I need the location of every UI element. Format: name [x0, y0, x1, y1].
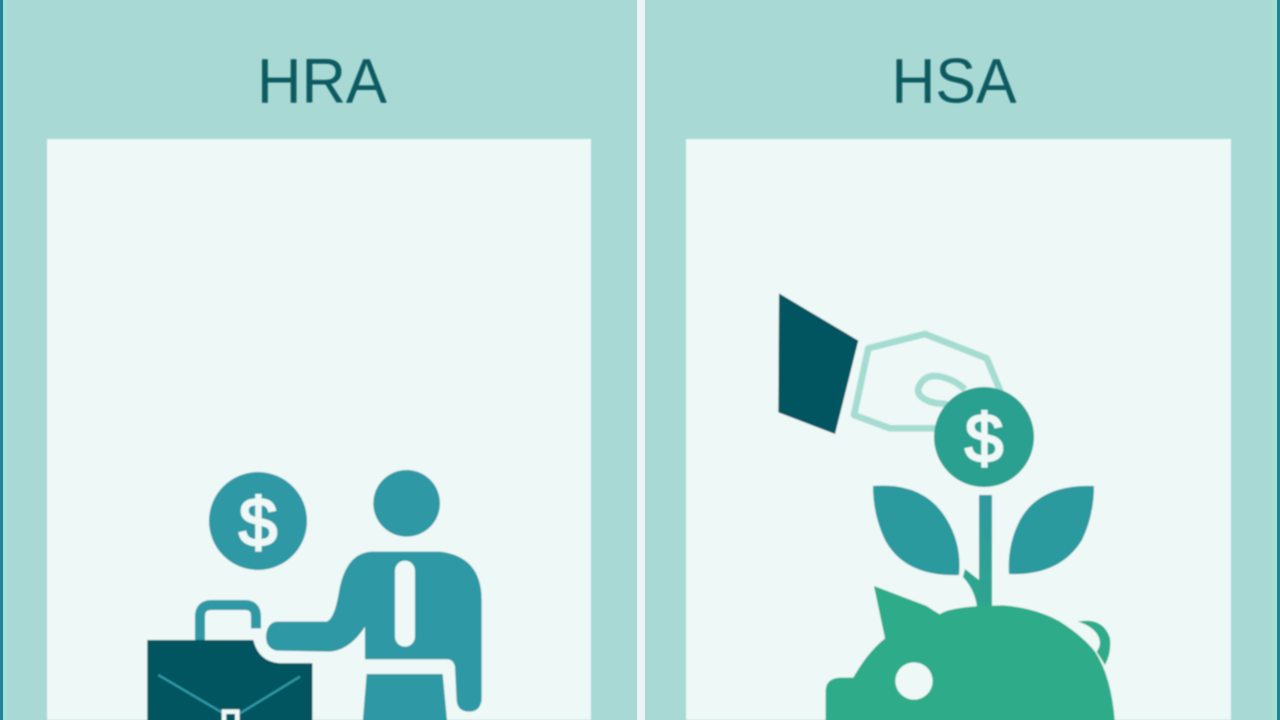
icon: person: [266, 470, 482, 720]
icon: plant: [873, 486, 1094, 607]
icon: dollar coin: [934, 387, 1034, 487]
icon: piggy bank: [826, 586, 1115, 720]
icon: dollar coin: $: [239, 484, 277, 561]
panel: HSA: [686, 46, 1231, 720]
icon: dollar coin: $: [965, 400, 1003, 477]
card: HRA: [47, 139, 591, 720]
panel: HRA: [47, 46, 591, 720]
icon: hand with cuff: [778, 293, 1001, 434]
icon: briefcase: [147, 605, 312, 720]
card: HSA: [686, 139, 1231, 720]
icon: dollar coin: [209, 472, 307, 570]
heading: HRA: HRA: [257, 46, 387, 116]
heading: HSA: HSA: [892, 46, 1016, 116]
